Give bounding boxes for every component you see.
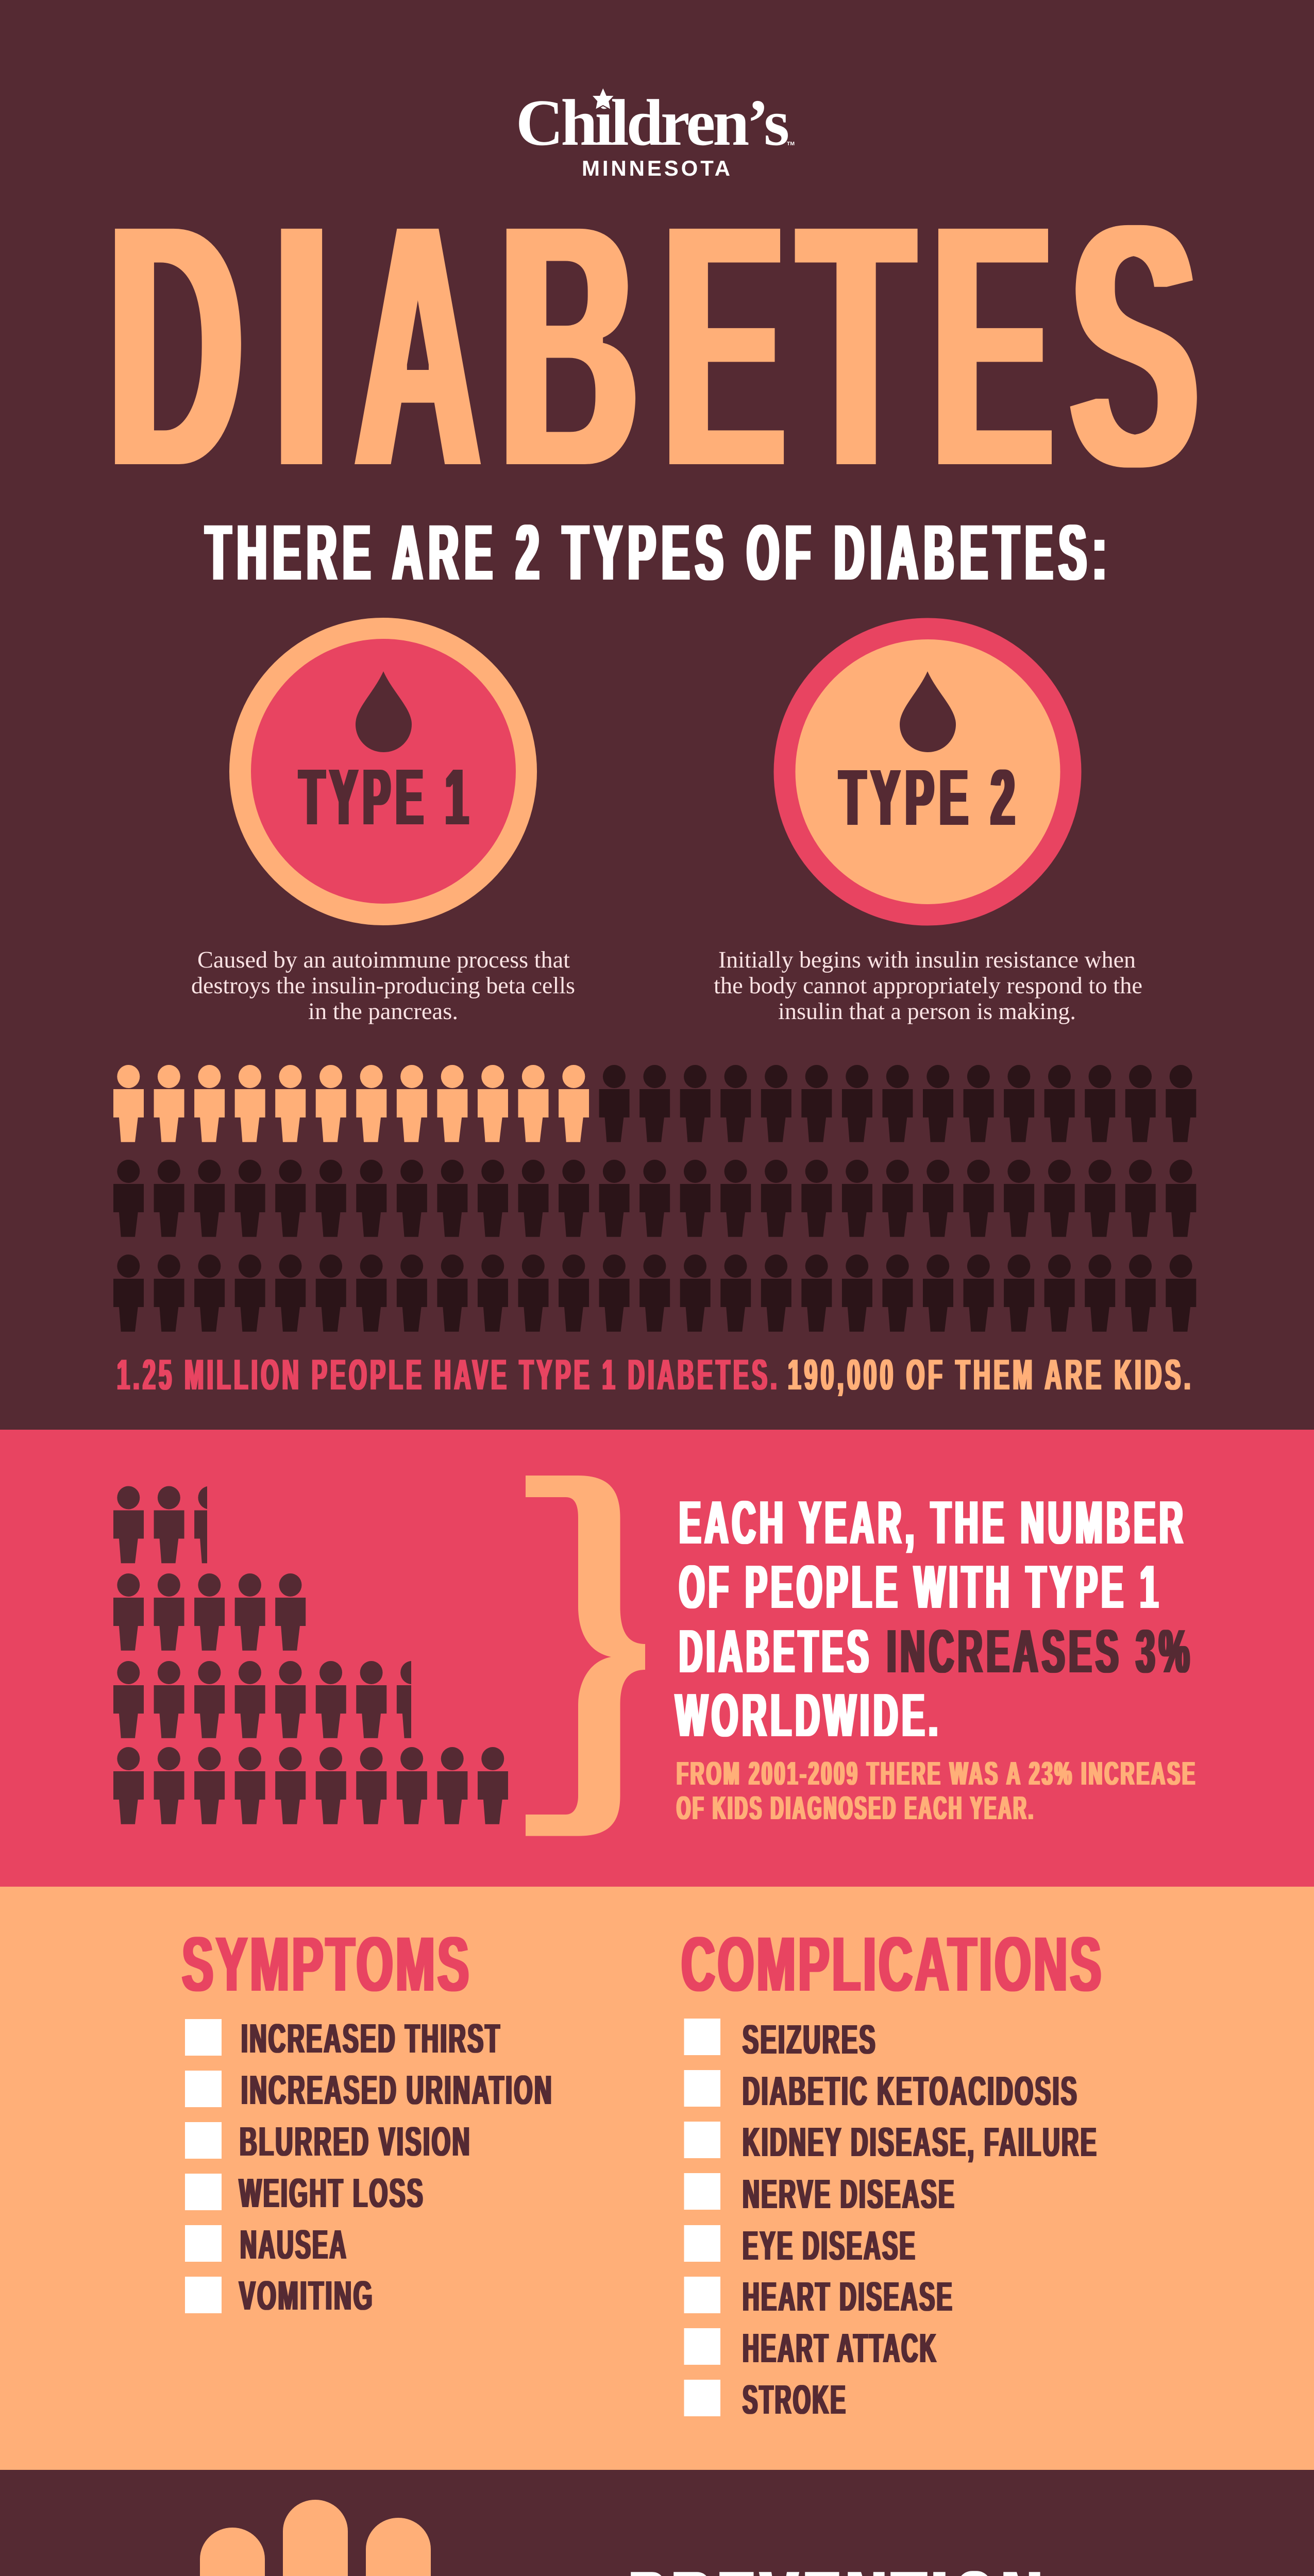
- title: DIABETES: B: [500, 150, 638, 541]
- badge label: TYPE 2: [839, 753, 1020, 842]
- list: symptoms: INCREASED THIRST: [241, 2015, 501, 2061]
- list: symptoms: BLURRED VISION: [240, 2119, 471, 2164]
- growth row 2: [113, 1573, 306, 1651]
- list: complications: EYE DISEASE: [743, 2223, 917, 2268]
- trademark: TM: [787, 141, 795, 147]
- icon: blood drop: [900, 671, 956, 752]
- checkboxes: complications: [684, 2019, 720, 2416]
- badge inner disc: [251, 639, 516, 904]
- text block: type 2 description: [714, 946, 1142, 1024]
- panel: red statistics band: [0, 1430, 1314, 1887]
- text block: type 2 description: Initially begins with insulin resistance when: [718, 946, 1136, 973]
- list: symptoms: WEIGHT LOSS: [239, 2170, 425, 2216]
- title: DIABETES: D: [109, 150, 243, 541]
- list: complications: SEIZURES: [743, 2016, 877, 2062]
- text block: type 1 description: Caused by an autoimmune process that: [197, 946, 570, 973]
- title: DIABETES: E: [933, 150, 1053, 541]
- text block: type 1 description: [191, 946, 575, 1024]
- panel: dark header background: [0, 0, 1314, 1430]
- text block: type 2 description: insulin that a person is making.: [778, 998, 1076, 1024]
- list: symptoms: INCREASED URINATION: [241, 2067, 553, 2113]
- pictogram row 2: [113, 1160, 1196, 1237]
- panel: dark prevention band: [0, 2470, 1314, 2576]
- icon: blood drop: [356, 671, 412, 752]
- panel: type 1 badge: [229, 618, 537, 925]
- list: complications: HEART DISEASE: [743, 2274, 954, 2319]
- text block: type 2 description: the body cannot appropriately respond to the: [714, 972, 1142, 998]
- badge inner disc: [796, 639, 1060, 904]
- title: DIABETES: E: [663, 150, 785, 541]
- growth row 3: [113, 1661, 427, 1738]
- badge outer ring: [774, 618, 1081, 925]
- list: complications: NERVE DISEASE: [743, 2171, 956, 2217]
- illustration: hand with pricked finger: [116, 2500, 514, 2576]
- text block: yearly increase headline: DIABETES: [679, 1617, 872, 1686]
- list: complications: STROKE: [743, 2377, 847, 2422]
- title: DIABETES: I: [274, 150, 329, 541]
- list: complications: HEART ATTACK: [743, 2325, 938, 2371]
- text block: type 1 description: in the pancreas.: [308, 998, 458, 1024]
- checkboxes: symptoms: [185, 2019, 222, 2313]
- pictogram row 1: [113, 1065, 1196, 1142]
- badge label: TYPE 1: [299, 753, 474, 841]
- title: DIABETES: [109, 150, 1198, 541]
- hand silhouette: [116, 2500, 514, 2576]
- list: complications: DIABETIC KETOACIDOSIS: [743, 2068, 1079, 2114]
- icon: curly brace: [526, 1476, 645, 1836]
- panel: type 2 badge: [774, 618, 1081, 925]
- text block: type 1 description: destroys the insulin-producing beta cells: [191, 972, 575, 998]
- icon: logo star: [592, 87, 615, 110]
- list: complications: [743, 2016, 1098, 2422]
- chart: growing rows of people: [113, 1486, 508, 1824]
- panel: peach symptoms and complications band: [0, 1887, 1314, 2470]
- growth row 4: [113, 1747, 508, 1824]
- text block: kids diagnosed note: [677, 1755, 1197, 1826]
- text block: yearly increase headline: [676, 1488, 1193, 1750]
- title: DIABETES: S: [1070, 150, 1198, 541]
- text block: yearly increase headline: WORLDWIDE.: [676, 1681, 942, 1750]
- badge outer ring: [229, 618, 537, 925]
- text block: kids diagnosed note: OF KIDS DIAGNOSED EACH YEAR.: [677, 1789, 1035, 1826]
- logo subline: MINNESOTA: [582, 156, 730, 180]
- title: DIABETES: T: [799, 150, 913, 541]
- growth row 1: [113, 1486, 207, 1563]
- list: symptoms: [239, 2015, 553, 2318]
- list: symptoms: VOMITING: [239, 2273, 374, 2318]
- list: symptoms: NAUSEA: [240, 2222, 348, 2267]
- logo: Children's Minnesota: [516, 86, 795, 180]
- heading: symptoms: SYMPTOMS: [182, 1921, 471, 2007]
- chart: pictogram of people with type 1: [113, 1065, 1196, 1332]
- logo wordmark: Children’s: [516, 86, 788, 159]
- title: DIABETES: A: [356, 150, 480, 541]
- pictogram row 3: [113, 1255, 1196, 1332]
